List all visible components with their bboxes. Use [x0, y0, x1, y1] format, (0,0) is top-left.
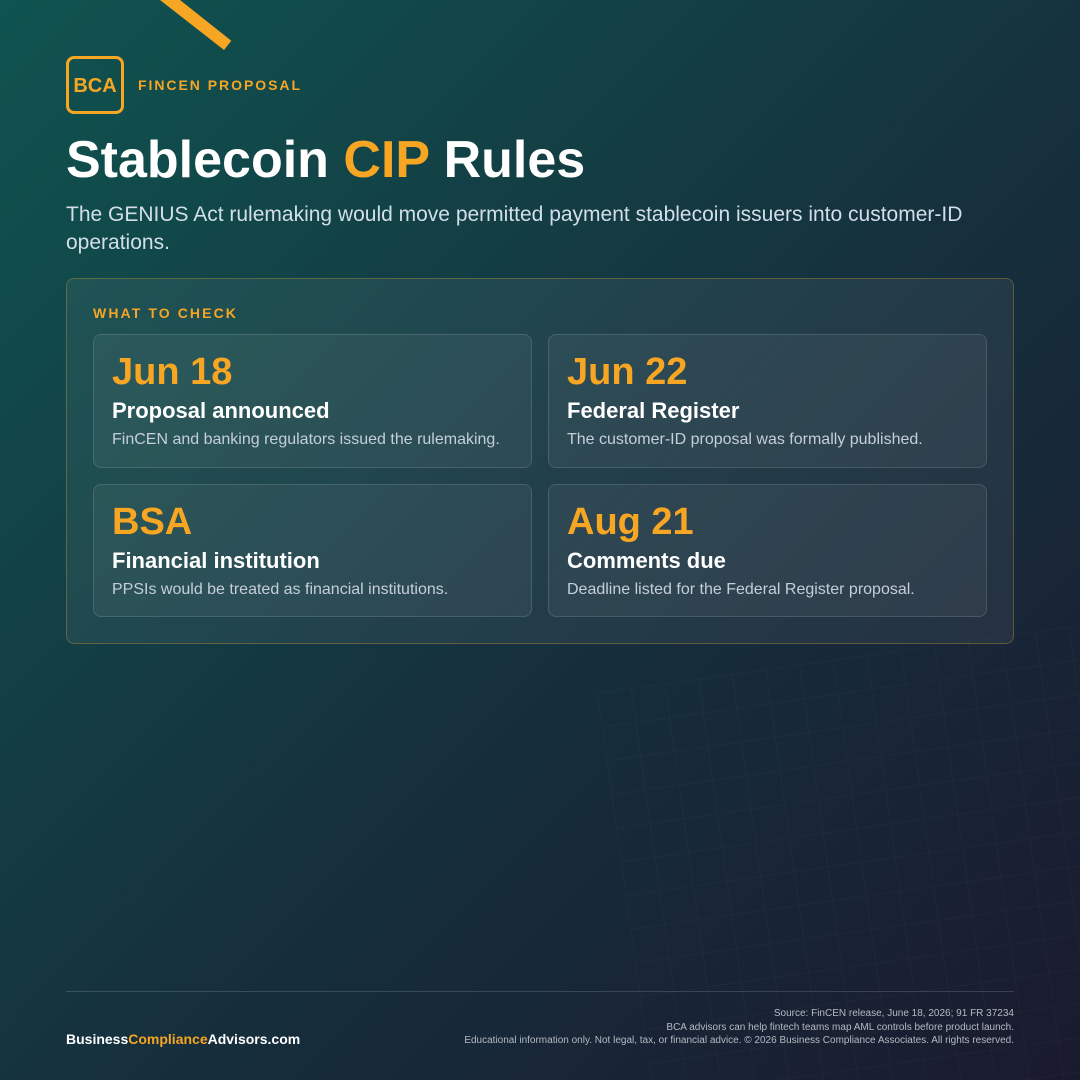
date: BSA [112, 501, 192, 543]
accent stripe [160, 0, 232, 50]
panel: what to check [66, 278, 1014, 644]
panel heading: WHAT TO CHECK [93, 305, 238, 321]
footer source and disclaimer [464, 1008, 1014, 1046]
card: Jun 18 [93, 334, 532, 468]
card text: The customer-ID proposal was formally published. [567, 431, 923, 448]
card text: FinCEN and banking regulators issued the rulemaking. [112, 431, 500, 448]
card heading: Proposal announced [112, 398, 330, 423]
footer source and disclaimer: BCA advisors can help fintech teams map AML controls before product launch. [666, 1022, 1014, 1033]
card text: Deadline listed for the Federal Register proposal. [567, 581, 915, 598]
logo: BCA badge: BCA [73, 75, 117, 97]
eyebrow label: FINCEN PROPOSAL [138, 77, 302, 93]
footer website: BusinessComplianceAdvisors.com [66, 1031, 300, 1047]
card heading: Federal Register [567, 398, 739, 423]
subtitle: The GENIUS Act rulemaking would move permitted payment stablecoin issuers into customer-ID operations. [66, 203, 962, 254]
logo: BCA badge [66, 56, 124, 114]
card heading: Comments due [567, 548, 726, 573]
card text: PPSIs would be treated as financial institutions. [112, 581, 448, 598]
footer source and disclaimer: Source: FinCEN release, June 18, 2026; 91 FR 37234 [774, 1008, 1014, 1019]
card: BSA [93, 484, 532, 617]
footer rule [66, 991, 1014, 992]
card: Aug 21 [548, 484, 987, 617]
title: Stablecoin CIP Rules [66, 131, 585, 189]
footer source and disclaimer: Educational information only. Not legal, tax, or financial advice. © 2026 Business Compliance Associates. All rights reserved. [464, 1035, 1014, 1046]
date: Jun 22 [567, 351, 687, 393]
card heading: Financial institution [112, 548, 320, 573]
date: Jun 18 [112, 351, 232, 393]
date: Aug 21 [567, 501, 694, 543]
card: Jun 22 [548, 334, 987, 468]
